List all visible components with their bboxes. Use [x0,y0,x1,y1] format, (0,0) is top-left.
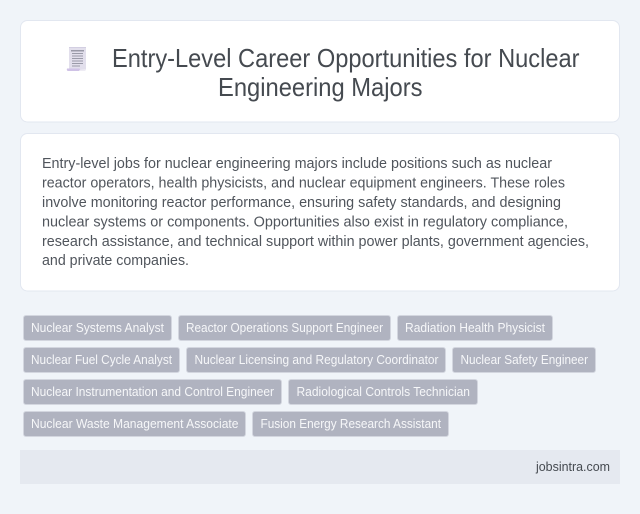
tag [186,348,446,372]
icon: document scroll [67,47,86,71]
title: Engineering Majors [218,72,422,102]
tag: Fusion Energy Research Assistant [260,416,441,431]
tag [24,412,246,436]
tag: Nuclear Safety Engineer [460,352,589,367]
tag [24,316,172,340]
tag [178,316,390,340]
text block: description: Entry-level jobs for nuclear engineering majors include positions such as nuclear [42,155,552,172]
text block: description: research assistance, and technical support within power plants, government agencies, [42,233,589,250]
tag [452,348,596,372]
panel: header [20,20,620,122]
title: Entry-Level Career Opportunities for Nuclear [112,43,580,73]
tag: Nuclear Licensing and Regulatory Coordinator [194,352,439,367]
tag [398,316,552,340]
tag: Nuclear Instrumentation and Control Engineer [31,384,275,399]
title [112,43,580,102]
tag: Nuclear Waste Management Associate [31,416,238,431]
tag: Radiological Controls Technician [296,384,470,399]
text block: description: involve monitoring reactor performance, ensuring safety standards, and designing [42,194,561,211]
tag [24,348,180,372]
text block: description: and private companies. [42,252,189,269]
footer [20,450,620,484]
tags: job titles [24,316,596,436]
tag [288,380,478,404]
tag: Nuclear Fuel Cycle Analyst [31,352,172,367]
text block: description [42,155,589,269]
tag: Reactor Operations Support Engineer [186,320,384,335]
text block: description: nuclear systems or components. Opportunities also exist in regulatory compliance, [42,214,568,230]
text block: description: reactor operators, health physicists, and nuclear equipment engineers. These roles [42,174,565,192]
tag: Nuclear Systems Analyst [31,320,164,335]
tag [252,412,448,436]
panel: description [20,134,620,291]
tag [24,380,282,404]
footer: source: jobsintra.com [535,459,610,474]
tag: Radiation Health Physicist [405,320,545,335]
